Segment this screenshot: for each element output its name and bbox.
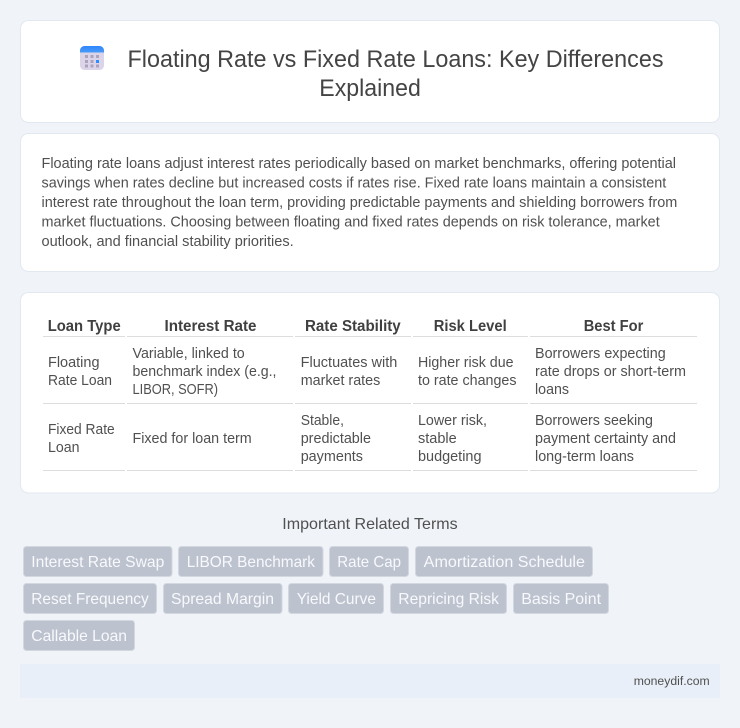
tag: callable loan	[24, 620, 134, 650]
table header row: Best For	[584, 318, 643, 335]
tag: repricing risk: Repricing Risk	[398, 591, 500, 608]
tag: reset frequency: Reset Frequency	[31, 591, 149, 608]
tag: callable loan: Callable Loan	[31, 628, 127, 645]
title text	[128, 46, 664, 102]
table row: fixed rate loan: budgeting	[418, 449, 482, 465]
summary text: Floating rate loans adjust interest rates periodically based on market benchmarks, offering potential	[42, 156, 676, 172]
tag: libor benchmark	[178, 546, 323, 576]
tag: rate cap	[330, 546, 408, 576]
table row: fixed rate loan: Loan	[48, 440, 80, 456]
summary text: market fluctuations. Choosing between floating and fixed rates depends on risk tolerance, market	[42, 214, 660, 230]
table row: floating rate loan: LIBOR, SOFR)	[132, 382, 218, 398]
panel: summary paragraph	[20, 134, 720, 272]
table row: floating rate loan: market rates	[301, 373, 380, 389]
tag: spread margin: Spread Margin	[171, 591, 274, 608]
tag: interest rate swap: Interest Rate Swap	[31, 554, 164, 571]
table row: fixed rate loan: payments	[301, 449, 363, 465]
tag: yield curve	[288, 584, 384, 614]
table row: floating rate loan: Borrowers expecting	[535, 346, 666, 362]
heading: important related terms: Important Related Terms	[282, 516, 458, 533]
table row: fixed rate loan: predictable	[301, 431, 371, 447]
summary text: outlook, and financial stability priorities.	[42, 234, 294, 250]
icon: calendar	[80, 46, 104, 70]
table header row: Risk Level	[434, 318, 507, 335]
footer	[20, 664, 720, 698]
table row: floating rate loan: Higher risk due	[418, 355, 514, 371]
table header row: Loan Type	[48, 318, 121, 335]
table row: floating rate loan: Variable, linked to	[132, 346, 245, 362]
title text: Floating Rate vs Fixed Rate Loans: Key Differences	[128, 46, 664, 73]
table row: fixed rate loan	[48, 413, 676, 465]
table row: floating rate loan: Fluctuates with	[301, 355, 397, 371]
tag: spread margin	[164, 584, 282, 614]
tag: reset frequency	[24, 584, 156, 614]
summary text: savings when rates decline but increased costs if rates rise. Fixed rate loans maintain a consistent	[42, 176, 666, 192]
table row: fixed rate loan: Fixed Rate	[48, 422, 115, 438]
table row: floating rate loan: rate drops or short-term	[535, 364, 686, 380]
table row: fixed rate loan: payment certainty and	[535, 431, 676, 447]
tag: libor benchmark: LIBOR Benchmark	[187, 554, 316, 571]
table row: floating rate loan: Floating	[48, 355, 100, 371]
table row: floating rate loan: loans	[535, 382, 569, 398]
footer: moneydif.com	[634, 674, 710, 688]
summary text: interest rate throughout the loan term, providing predictable payments and shielding borrowers from	[42, 195, 677, 211]
tag: rate cap: Rate Cap	[337, 554, 401, 571]
table row: fixed rate loan: Fixed for loan term	[132, 431, 252, 447]
table row: floating rate loan: Rate Loan	[48, 373, 112, 389]
table header row	[48, 318, 643, 335]
table row: fixed rate loan: long-term loans	[535, 449, 634, 465]
tag: repricing risk	[390, 584, 506, 614]
table row: floating rate loan: to rate changes	[418, 373, 516, 389]
table row: fixed rate loan: Borrowers seeking	[535, 413, 653, 429]
related term tags	[24, 546, 608, 650]
tag: amortization schedule: Amortization Schedule	[424, 554, 585, 571]
tag: yield curve: Yield Curve	[297, 591, 376, 608]
table row: fixed rate loan: Stable,	[301, 413, 344, 429]
title text: Explained	[319, 75, 421, 102]
tag: amortization schedule	[416, 546, 592, 576]
tag: interest rate swap	[24, 546, 172, 576]
summary text	[42, 156, 677, 250]
table header row: Interest Rate	[164, 318, 257, 335]
table header row: Rate Stability	[305, 318, 401, 335]
table row: fixed rate loan: Lower risk,	[418, 413, 487, 429]
table row: floating rate loan: benchmark index (e.g.,	[132, 364, 276, 380]
panel: comparison table	[20, 292, 720, 493]
tag: basis point: Basis Point	[521, 591, 602, 608]
table row: floating rate loan	[48, 346, 686, 398]
table row: fixed rate loan: stable	[418, 431, 457, 447]
tag: basis point	[514, 584, 608, 614]
panel: title	[20, 20, 720, 122]
